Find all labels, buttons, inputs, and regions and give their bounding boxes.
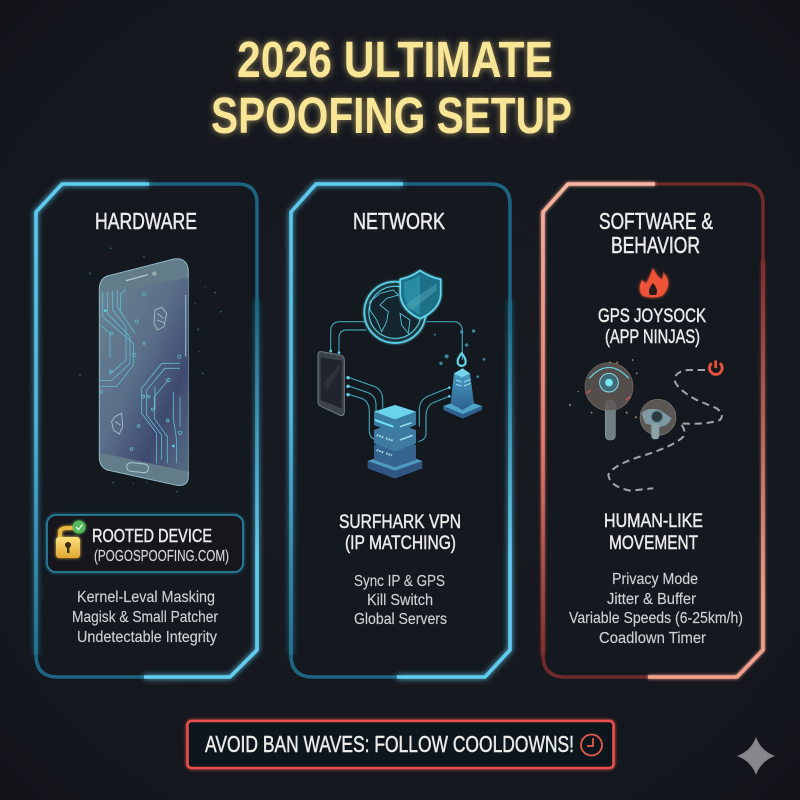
panel: network (291, 184, 510, 677)
callout: rooted device (47, 515, 243, 572)
text: gps joysock heading (598, 305, 706, 348)
text: network feature list (354, 573, 447, 628)
text: behavior feature list: Variable Speeds (6-25km/h) (569, 610, 743, 627)
icon: right joystick (640, 399, 676, 439)
heading: hardware: HARDWARE (95, 208, 197, 234)
heading: software and behavior: BEHAVIOR (611, 232, 700, 258)
title: SPOOFING SETUP (211, 87, 572, 144)
text: behavior feature list (569, 571, 743, 647)
text: human-like movement heading: HUMAN-LIKE (604, 511, 703, 532)
text: rooted device label: (POGOSPOOFING.COM) (94, 548, 229, 565)
text: behavior feature list: Privacy Mode (612, 571, 698, 588)
icon: translucent phone with circuit traces (79, 247, 222, 493)
diagram: phone, globe, server and tower network (318, 271, 485, 479)
text: surfshark heading (339, 512, 461, 554)
text: hardware feature list (72, 589, 219, 646)
icon: server stack (368, 405, 422, 479)
text: surfshark heading: (IP MATCHING) (345, 533, 456, 554)
text: rooted device label: ROOTED DEVICE (92, 526, 212, 546)
title (211, 31, 572, 144)
heading: network: NETWORK (353, 208, 446, 234)
icon: globe (364, 282, 426, 343)
text: rooted device label (92, 526, 229, 565)
icon: shield (400, 271, 441, 319)
text: human-like movement heading: MOVEMENT (609, 533, 698, 554)
text: human-like movement heading (604, 511, 703, 554)
text: network feature list: Global Servers (354, 611, 447, 628)
icon: flame (640, 268, 668, 298)
callout: ban wave warning (188, 721, 614, 768)
icon: left joystick (569, 359, 637, 440)
text: behavior feature list: Jitter & Buffer (607, 591, 697, 608)
icon: smartphone (318, 350, 350, 416)
text: gps joysock heading: (APP NINJAS) (605, 326, 700, 348)
heading: software and behavior: SOFTWARE & (599, 208, 713, 234)
icon: power symbol (709, 361, 722, 374)
icon: tower with flame (434, 329, 485, 419)
text: warning message: AVOID BAN WAVES: FOLLOW COOLDOWNS! (205, 731, 574, 757)
icon: golden padlock with green check (56, 520, 86, 558)
text: network feature list: Sync IP & GPS (354, 573, 445, 590)
diagram: joysticks and dashed route (569, 359, 722, 491)
heading: software and behavior (599, 208, 713, 258)
icon: sparkle watermark (737, 737, 775, 775)
text: hardware feature list: Magisk & Small Patcher (72, 609, 219, 626)
text: hardware feature list: Kernel-Leval Masking (77, 589, 215, 606)
text: surfshark heading: SURFHARK VPN (339, 512, 461, 533)
panel: hardware (36, 184, 257, 677)
title: 2026 ULTIMATE (237, 31, 553, 88)
text: network feature list: Kill Switch (367, 592, 433, 609)
text: behavior feature list: Coadlown Timer (599, 630, 707, 647)
panel: software and behavior (543, 184, 763, 677)
text: gps joysock heading: GPS JOYSOCK (598, 305, 706, 327)
text: hardware feature list: Undetectable Integrity (77, 629, 217, 646)
icon: clock (581, 734, 602, 756)
